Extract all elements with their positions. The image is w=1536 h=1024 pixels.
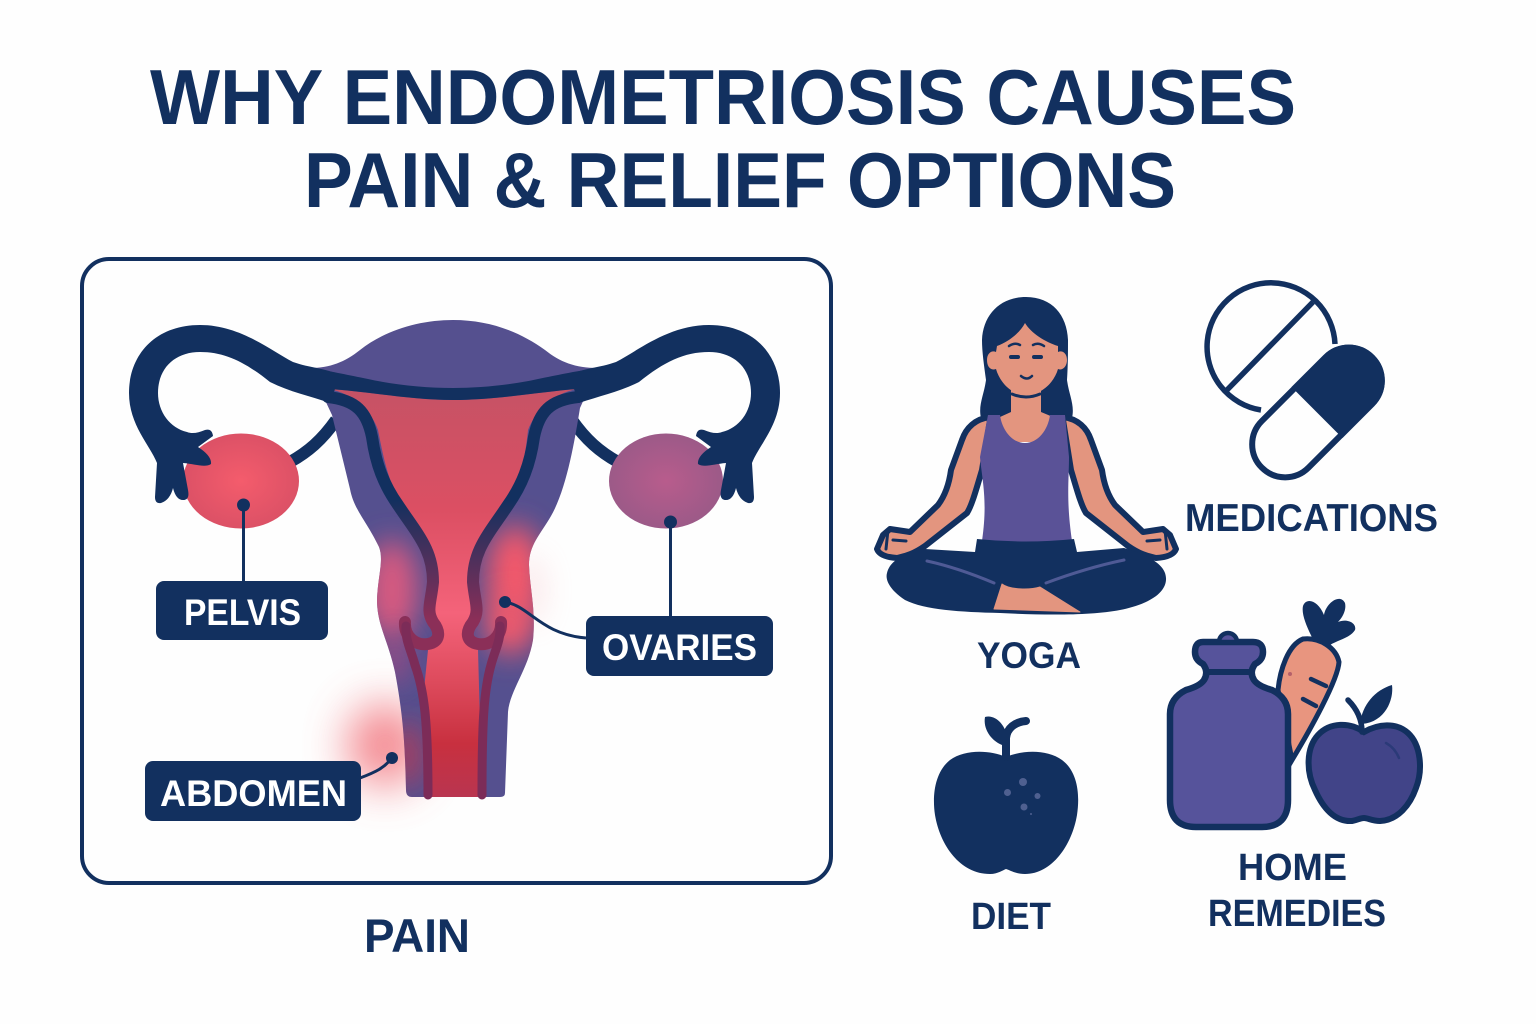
uterine cavity [328,389,578,797]
hot water bottle [1170,642,1288,827]
callout: abdomen [145,752,398,821]
ovary right [609,434,723,528]
leg highlights [927,560,1124,583]
ovary left (pelvis) [183,434,299,528]
round pill [1207,283,1335,410]
panel label: pain: PAIN [364,909,470,962]
icon: yoga woman [877,297,1176,615]
carrot leaves [1303,599,1355,645]
icon: apple (diet) [934,717,1078,874]
label: medications: MEDICATIONS [1185,497,1438,540]
facial features [1009,344,1044,397]
callout: pelvis [156,498,328,640]
icon: home remedies [1170,599,1420,827]
label: yoga: YOGA [977,635,1081,676]
pain glow at abdomen [347,554,546,787]
hair back [980,297,1073,418]
fallopian tubes [129,325,780,503]
panel: pain anatomy [82,259,831,883]
title: WHY ENDOMETRIOSIS CAUSES [150,53,1296,141]
icon: medications [1207,283,1400,493]
crossed legs [887,539,1166,615]
uterine wall lines [328,397,578,795]
neck and chest [1000,385,1053,442]
capsule [1236,330,1400,493]
label: home remedies: REMEDIES [1208,893,1386,935]
uterus body [310,320,598,797]
callout: pelvis: PELVIS [184,592,301,633]
callout: ovaries [499,516,773,676]
title: PAIN & RELIEF OPTIONS [304,136,1176,224]
label: home remedies [1208,847,1386,935]
tank top [980,415,1072,544]
label: diet: DIET [971,896,1051,938]
callout: abdomen: ABDOMEN [160,773,347,814]
label: home remedies: HOME [1238,847,1347,889]
arms [877,417,1176,558]
title [150,53,1296,224]
ligaments [290,420,618,462]
carrot [1278,639,1339,760]
finger details [886,530,1167,549]
face [987,323,1067,395]
small apple [1309,725,1420,821]
callout: ovaries: OVARIES [602,627,757,668]
foot [994,584,1080,612]
